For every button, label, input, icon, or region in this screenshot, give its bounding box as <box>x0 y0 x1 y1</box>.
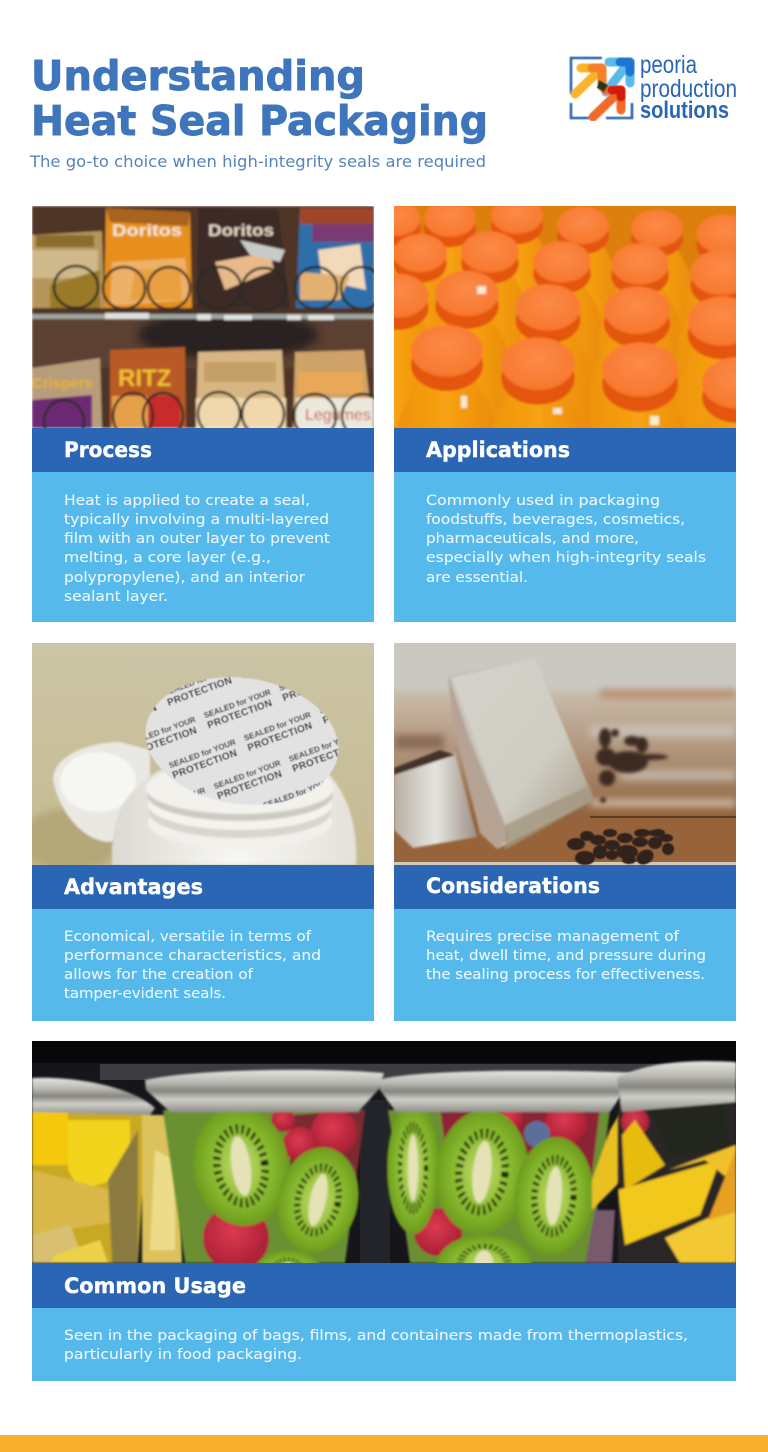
common usage body text <box>64 1327 688 1363</box>
advantages body text: tamper-evident seals. <box>64 985 226 1002</box>
process body text: Heat is applied to create a seal, <box>64 492 310 509</box>
process body text <box>64 492 330 605</box>
applications body text: especially when high-integrity seals <box>426 549 706 566</box>
left pineapple cup <box>32 1078 182 1263</box>
foil seal: PROTECTION <box>190 815 258 849</box>
photo: vending machine snacks: Doritos <box>208 221 274 240</box>
applications body text: are essential. <box>426 569 528 586</box>
foil seal: PROTECTION <box>131 725 199 759</box>
photo: vending machine snacks: Crispers <box>32 375 93 392</box>
foil seal: PROTECTION <box>206 698 274 731</box>
foil seal: SEALED for YOUR <box>203 688 272 720</box>
foil seal: PROTECTION <box>291 741 359 775</box>
kiwi cup one <box>144 1068 386 1263</box>
common usage body text: Seen in the packaging of bags, films, and containers made from thermoplastics, <box>64 1327 688 1344</box>
foil bags <box>394 658 594 850</box>
logo wordmark: solutions <box>640 97 729 124</box>
applications body text <box>426 492 706 586</box>
right mango cup <box>617 1061 736 1263</box>
applications body text: foodstuffs, beverages, cosmetics, <box>426 511 685 528</box>
applications body text: Commonly used in packaging <box>426 492 660 509</box>
foil seal: PROTECTION <box>141 796 208 830</box>
shelf rail <box>32 314 374 319</box>
foil seal: SEALED for YOUR <box>278 660 347 693</box>
kiwi cup two <box>378 1069 633 1263</box>
advantages body text <box>64 928 321 1002</box>
process body text: typically involving a multi-layered <box>64 511 329 528</box>
front coffee beans <box>567 829 674 868</box>
panel: process <box>32 206 384 622</box>
photo: foil coffee bags and beans <box>380 643 750 868</box>
photo: sealed jar with foil liner <box>32 643 374 865</box>
foil seal: PROTECTION <box>246 720 314 754</box>
considerations body text: heat, dwell time, and pressure during <box>426 947 706 964</box>
foil seal: SEALED for YOUR <box>238 638 307 670</box>
panel: advantages <box>32 643 374 1021</box>
panel: common usage <box>32 1041 736 1381</box>
foil seal: SEALED for YOUR <box>212 758 282 791</box>
icon: logo bracket and arrows <box>571 58 632 118</box>
title: Understanding <box>31 52 365 100</box>
process body text: sealant layer. <box>64 588 168 605</box>
foil seal: SEALED for YOUR <box>288 731 357 764</box>
subtitle: The go-to choice when high-integrity seals are required <box>29 152 486 171</box>
foil seal: PROTECTION <box>281 670 349 704</box>
jar body <box>112 762 356 865</box>
foil seal: PROTECTION <box>241 648 309 681</box>
advantages body text: allows for the creation of <box>64 966 254 983</box>
foil seal: SEALED for YOUR <box>318 683 388 715</box>
common usage header band <box>32 1263 736 1308</box>
foil seal: PROTECTION <box>265 788 333 822</box>
spiral coils <box>44 266 384 444</box>
logo <box>571 51 737 124</box>
foil seal: PROTECTION <box>171 748 239 781</box>
logo wordmark <box>640 51 737 124</box>
title: Heat Seal Packaging <box>31 97 488 145</box>
photo: fruit cups <box>32 1041 736 1263</box>
open white cap <box>53 742 150 842</box>
photo: vending machine snacks: RITZ <box>118 365 171 392</box>
logo wordmark: peoria <box>640 51 697 79</box>
photo: vending machine snacks: Doritos <box>112 221 182 240</box>
process body text: polypropylene), and an interior <box>64 569 305 586</box>
applications heading: Applications <box>426 438 570 463</box>
foil seal: PROTECTION <box>91 703 158 736</box>
panel: applications <box>394 206 736 622</box>
advantages header band <box>32 865 374 909</box>
foil seal: SEALED for YOUR <box>168 737 237 770</box>
common usage heading: Common Usage <box>64 1274 246 1299</box>
logo wordmark: production <box>640 75 737 103</box>
common usage text band <box>32 1308 736 1381</box>
foil seal: SEALED for YOUR <box>243 710 312 743</box>
photo: vending machine snacks: Legumes <box>305 407 371 424</box>
foil seal: SEALED for YOUR <box>87 692 157 725</box>
advantages text band <box>32 909 374 1021</box>
advantages body text: Economical, versatile in terms of <box>64 928 312 945</box>
foil seal: SEALED for YOUR <box>92 765 162 798</box>
considerations body text: Requires precise management of <box>426 928 680 945</box>
foil seal: SEALED for YOUR <box>127 715 197 748</box>
considerations header band <box>394 865 736 909</box>
footer bar <box>0 1435 768 1452</box>
considerations heading: Considerations <box>426 874 600 899</box>
process header band <box>32 428 374 472</box>
advantages body text: performance characteristics, and <box>64 947 321 964</box>
foil seal <box>145 676 339 805</box>
foil seal: SEALED for YOUR <box>262 778 332 810</box>
foil seal: PROTECTION <box>166 675 234 709</box>
common usage body text: particularly in food packaging. <box>64 1346 302 1363</box>
foil seal: PROTECTION <box>216 769 284 802</box>
applications body text: pharmaceuticals, and more, <box>426 530 639 547</box>
process heading: Process <box>64 438 152 463</box>
applications text band <box>394 472 736 622</box>
considerations body text <box>426 928 706 983</box>
panel: considerations <box>380 643 750 1021</box>
title <box>31 52 488 145</box>
blurred beans pile <box>596 728 668 803</box>
foil seal: SEALED for YOUR <box>187 805 256 838</box>
process body text: melting, a core layer (e.g., <box>64 549 271 566</box>
foil seal: SEALED for YOUR <box>162 665 232 698</box>
applications header band <box>394 428 736 472</box>
foil seal: SEALED for YOUR <box>137 786 207 818</box>
photo: vending machine snacks <box>32 206 384 444</box>
photo: orange juice bottles <box>394 206 736 428</box>
advantages heading: Advantages <box>64 875 203 900</box>
considerations body text: the sealing process for effectiveness. <box>426 966 705 983</box>
process text band <box>32 472 374 622</box>
foil seal: PROTECTION <box>96 775 163 809</box>
foil seal: PROTECTION <box>321 693 389 727</box>
considerations text band <box>394 909 736 1021</box>
process body text: film with an outer layer to prevent <box>64 530 330 547</box>
